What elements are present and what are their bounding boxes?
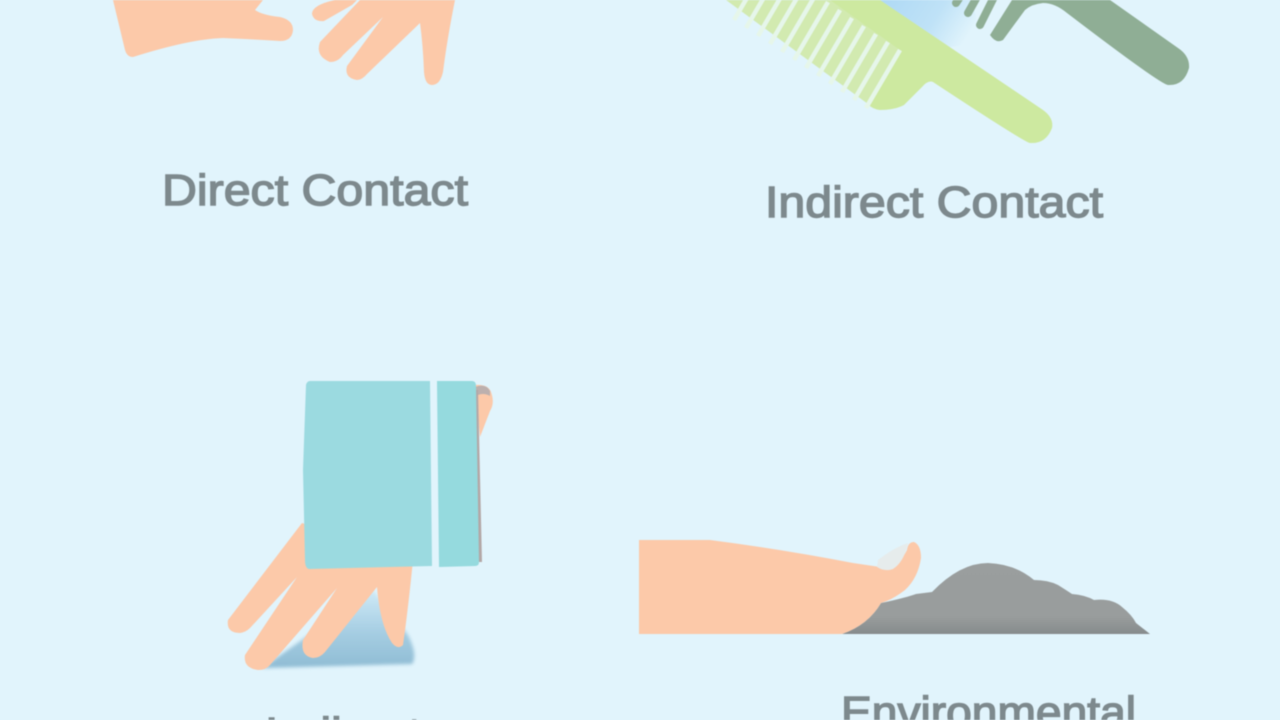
panel: direct contact: [113, 0, 468, 215]
icon: finger: [639, 540, 921, 634]
icon: right hand with fingers: [312, 0, 455, 85]
panel: indirect contact combs: [726, 0, 1189, 227]
icon: dark green comb: [956, 0, 1189, 85]
icon: left hand reaching: [113, 0, 293, 57]
heading: direct contact: Direct Contact: [162, 166, 468, 215]
icon: hand under book: [228, 523, 413, 670]
heading: indirect contact: Indirect Contact: [765, 178, 1103, 227]
icon: soil pile: [842, 563, 1150, 634]
icon: thumb tip nail: [475, 386, 490, 396]
icon: light green comb: [726, 0, 1052, 143]
icon: book spine edge: [474, 390, 482, 562]
icon: blue gradient between combs: [880, 0, 982, 48]
panel: environmental: [639, 540, 1150, 720]
icon: book large cover: [303, 381, 432, 569]
icon: thumb over book edge: [475, 385, 493, 437]
icon: fingernail: [877, 543, 908, 570]
icon: shadow under hand: [262, 590, 414, 668]
icon: book narrow cover: [437, 381, 479, 567]
panel: indirect contact book: [228, 381, 493, 720]
